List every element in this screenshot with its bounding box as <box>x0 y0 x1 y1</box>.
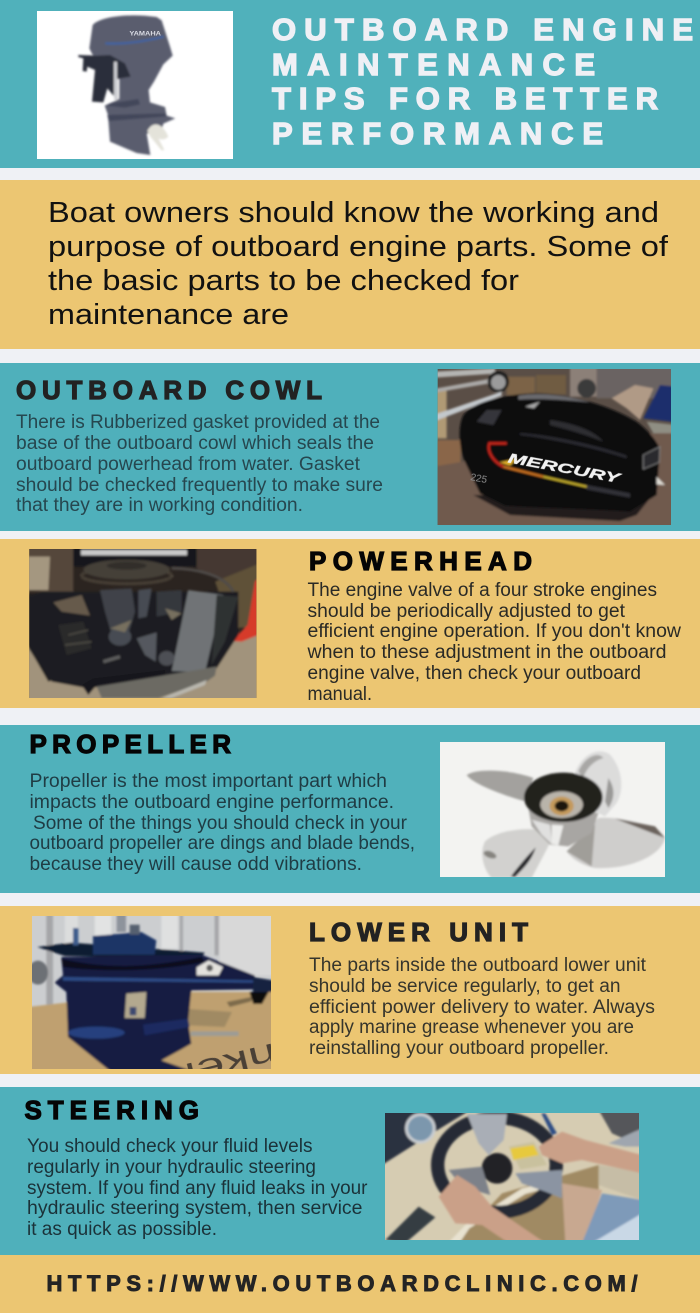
heading: outboard cowl: OUTBOARD COWL <box>16 375 322 405</box>
title: OUTBOARD ENGINE <box>272 12 693 47</box>
website url: HTTPS://WWW.OUTBOARDCLINIC.COM/ <box>46 1271 638 1296</box>
text: lower unit <box>309 955 655 1059</box>
title: PERFORMANCE <box>272 116 603 151</box>
text: outboard cowl <box>16 412 383 516</box>
intro text: the basic parts to be checked for <box>48 265 519 297</box>
heading: lower unit: LOWER UNIT <box>309 917 528 947</box>
panel: powerhead <box>0 539 700 708</box>
text: propeller: Some of the things you should check in your <box>33 813 408 834</box>
text: propeller: outboard propeller are dings and blade bends, <box>30 833 415 854</box>
heading: steering: STEERING <box>24 1095 199 1125</box>
text: powerhead: engine valve, then check your outboard <box>308 663 641 684</box>
text: outboard cowl: There is Rubberized gasket provided at the <box>16 412 380 433</box>
text: outboard cowl: should be checked frequently to make sure <box>16 475 383 496</box>
text: outboard cowl: outboard powerhead from water. Gasket <box>16 454 361 475</box>
title: TIPS FOR BETTER <box>272 81 658 116</box>
text: powerhead: The engine valve of a four stroke engines <box>308 580 657 601</box>
heading: powerhead: POWERHEAD <box>309 546 532 576</box>
panel: propeller <box>0 725 700 893</box>
text: lower unit: The parts inside the outboard lower unit <box>309 955 647 976</box>
text: steering: it as quick as possible. <box>27 1219 217 1240</box>
intro text: Boat owners should know the working and <box>48 197 659 229</box>
text: steering: hydraulic steering system, then service <box>27 1198 362 1219</box>
logo text: MERCURY <box>507 450 624 486</box>
intro text: purpose of outboard engine parts. Some of <box>48 231 669 263</box>
text: powerhead <box>306 580 681 705</box>
image: powerhead <box>29 549 256 698</box>
box lettering: anker <box>176 1030 308 1094</box>
panel: footer <box>0 1255 700 1313</box>
text: propeller <box>30 771 415 875</box>
title <box>272 12 693 151</box>
panel: steering <box>0 1087 700 1255</box>
panel: outboard cowl <box>0 363 700 531</box>
text: lower unit: reinstalling your outboard propeller. <box>309 1038 609 1059</box>
text: lower unit: should be service regularly, to get an <box>309 976 620 997</box>
text: lower unit: efficient power delivery to water. Always <box>309 997 655 1018</box>
image: propeller <box>440 742 665 877</box>
text: outboard cowl: that they are in working condition. <box>16 495 303 516</box>
intro text <box>48 197 669 331</box>
text: steering: You should check your fluid levels <box>27 1136 312 1157</box>
text: propeller: Propeller is the most important part which <box>30 771 387 792</box>
text: propeller: impacts the outboard engine performance. <box>30 792 394 813</box>
model text: 225 <box>469 472 488 486</box>
text: steering: regularly in your hydraulic steering <box>27 1157 316 1178</box>
text: powerhead: when to these adjustment in the outboard <box>306 642 666 663</box>
text: outboard cowl: base of the outboard cowl which seals the <box>16 433 374 454</box>
title: MAINTENANCE <box>272 47 595 82</box>
text: powerhead: manual. <box>308 684 372 705</box>
image: outboard engine <box>37 11 233 159</box>
text: steering: system. If you find any fluid leaks in your <box>27 1178 368 1199</box>
text: powerhead: should be periodically adjusted to get <box>308 601 626 622</box>
text: powerhead: efficient engine operation. If you don't know <box>308 621 681 642</box>
heading: propeller: PROPELLER <box>30 729 231 759</box>
panel: lower unit <box>0 906 700 1094</box>
panel: introduction <box>0 180 700 349</box>
text: lower unit: apply marine grease whenever you are <box>309 1017 634 1038</box>
image: steering wheel <box>385 1113 639 1240</box>
image: lower unit <box>32 916 308 1094</box>
intro text: maintenance are <box>48 299 289 331</box>
image: mercury cowl <box>438 369 671 525</box>
panel: header <box>0 0 700 168</box>
text: propeller: because they will cause odd vibrations. <box>30 854 362 875</box>
text: steering <box>27 1136 368 1240</box>
brand label on cowl: YAMAHA <box>129 32 162 38</box>
